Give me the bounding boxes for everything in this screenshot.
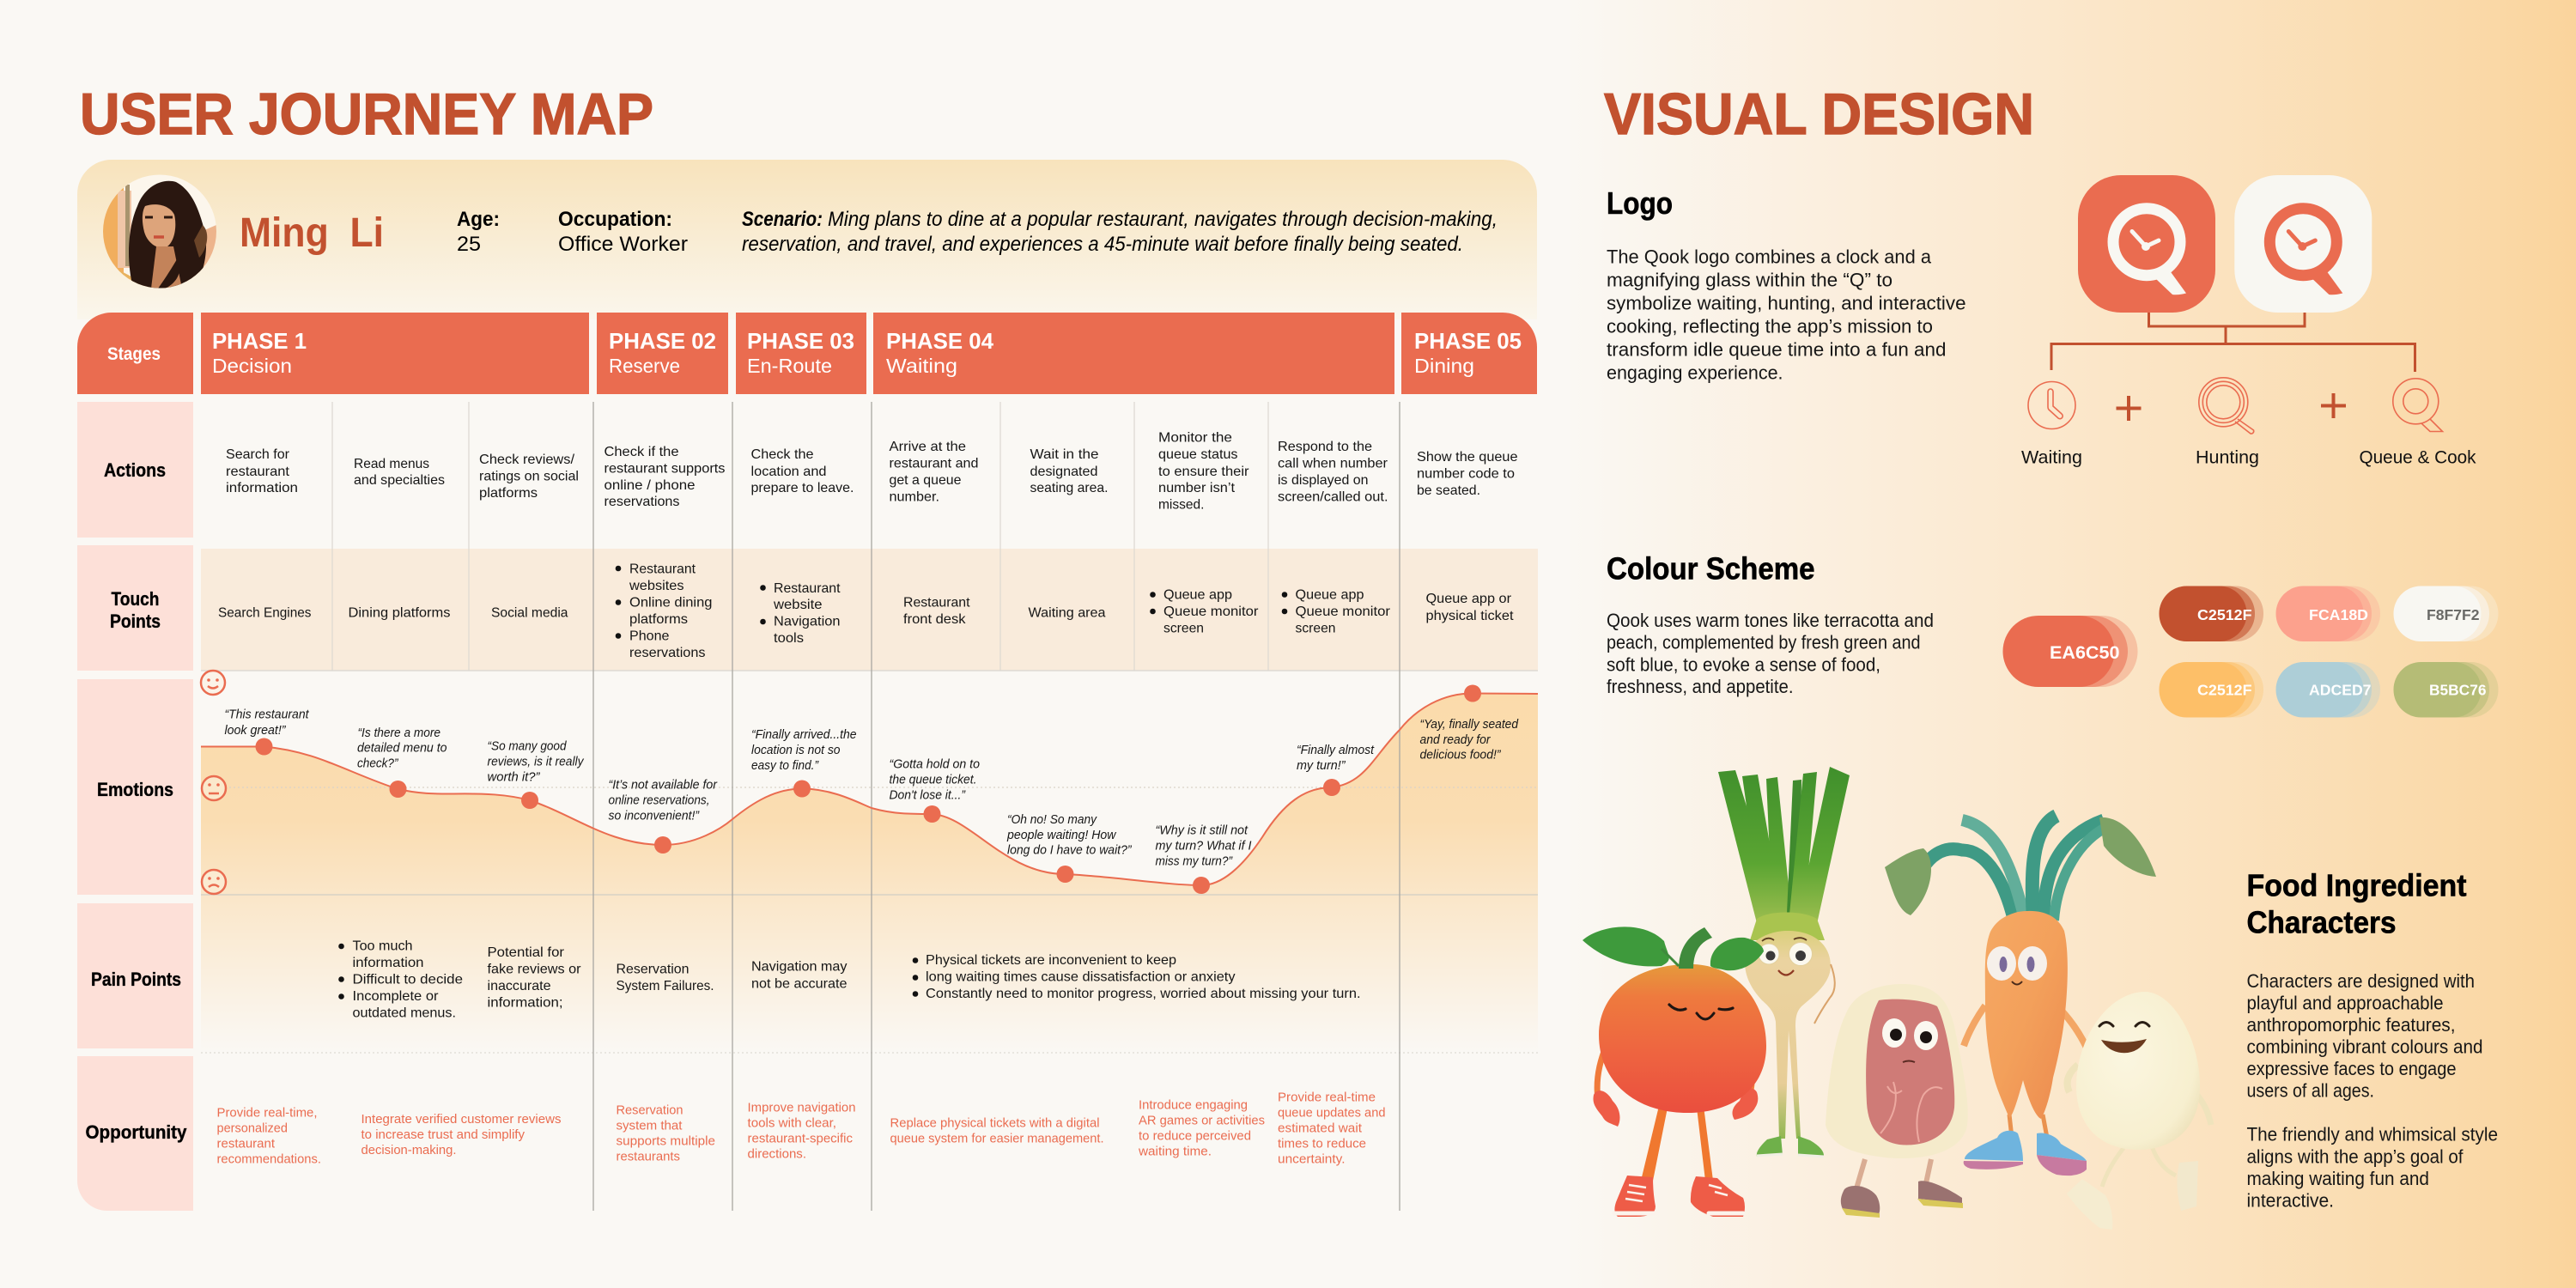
action 6: get a queue xyxy=(890,473,962,488)
action 1: restaurant xyxy=(226,465,290,479)
swatch: FCA18D xyxy=(2275,586,2380,641)
swatch: F8F7F2: F8F7F2 xyxy=(2427,606,2480,623)
label: emotions xyxy=(77,679,193,895)
action 4: reservations xyxy=(605,495,680,509)
action 1 xyxy=(226,447,298,495)
logo description: cooking, reflecting the app’s mission to xyxy=(1607,316,1933,337)
panel: logo section xyxy=(1607,175,2476,467)
quote 10: delicious food!” xyxy=(1420,749,1502,762)
touch point 10: physical ticket xyxy=(1425,609,1514,623)
character: carrot xyxy=(1885,816,2156,1176)
logo: coral tile xyxy=(2078,175,2215,313)
icon: happy face xyxy=(201,671,225,695)
panel: stages bar xyxy=(77,313,1537,394)
action 7: Wait in the xyxy=(1030,447,1099,462)
title: visual design: VISUAL DESIGN xyxy=(1604,82,2034,147)
quote 9: my turn!” xyxy=(1297,759,1346,773)
label: pain points xyxy=(77,903,193,1048)
touch point 4: Restaurant xyxy=(629,562,696,577)
scenario: Ming plans to dine at a popular restaurant, navigates through decision-making, xyxy=(828,208,1498,231)
action 7: seating area. xyxy=(1030,481,1108,495)
opportunity 6: to reduce perceived xyxy=(1139,1128,1251,1144)
panel: pain points row xyxy=(338,939,1361,1020)
touch point 6: Restaurant xyxy=(903,596,970,610)
label: emotions: Emotions xyxy=(97,779,173,800)
logo description: symbolize waiting, hunting, and interactive xyxy=(1607,292,1966,314)
quote 8: “Why is it still not xyxy=(1156,824,1249,838)
action 6: Arrive at the xyxy=(890,440,966,454)
quote 9 xyxy=(1297,744,1375,773)
pain point: fake reviews xyxy=(488,945,581,1010)
opportunity 1: restaurant xyxy=(216,1137,276,1151)
opportunity 2: Integrate verified customer reviews xyxy=(361,1112,562,1127)
pain point: decision menus: information xyxy=(352,956,424,970)
quote 9: “Finally almost xyxy=(1297,744,1375,757)
quote 8: my turn? What if I xyxy=(1156,840,1252,854)
swatch: EA6C50: EA6C50 xyxy=(2050,643,2119,663)
emotion curve area fill xyxy=(201,694,1538,1053)
action 3: ratings on social xyxy=(479,469,579,484)
opportunity 3: system that xyxy=(617,1118,683,1133)
character: apple xyxy=(1583,927,1766,1217)
action 9: Respond to the xyxy=(1278,440,1372,454)
pain point: reservation failures: Reservation xyxy=(617,962,689,977)
character: meat xyxy=(1826,984,1968,1218)
heading: food ingredient characters xyxy=(2246,867,2467,939)
opportunity 7: estimated wait xyxy=(1278,1121,1363,1135)
opportunity 6: AR games or activities xyxy=(1139,1113,1265,1128)
pain point: waiting: Constantly need to monitor progress, worried about missing your turn. xyxy=(926,987,1360,1001)
action 7 xyxy=(1030,447,1108,495)
touch point 9: screen xyxy=(1295,622,1336,635)
age: 25 xyxy=(457,233,481,256)
pain point: fake reviews: Potential for xyxy=(488,945,565,960)
pain point: decision menus: Difficult to decide xyxy=(352,972,463,987)
touch point 9 xyxy=(1282,587,1391,635)
label: touch points xyxy=(77,545,193,671)
quote 3 xyxy=(488,740,584,785)
characters description xyxy=(2246,970,2498,1211)
swatch: B5BC76: B5BC76 xyxy=(2429,682,2487,699)
curve points xyxy=(256,685,1481,894)
occupation xyxy=(558,208,688,256)
logo: light tile xyxy=(2234,175,2372,313)
occupation: Occupation: xyxy=(558,208,672,231)
phase 04: PHASE 04 xyxy=(886,328,994,354)
quote 2 xyxy=(357,726,447,771)
phase 05: Dining xyxy=(1414,355,1474,377)
touch point 10 xyxy=(1425,592,1514,623)
touch point 5: Navigation xyxy=(774,615,840,629)
swatch: B5BC76 xyxy=(2394,662,2499,718)
quote 6: Don't lose it...” xyxy=(890,788,966,802)
pain point: decision menus xyxy=(338,939,463,1020)
swatch: peach yellow xyxy=(2159,662,2263,718)
label: actions xyxy=(77,402,193,538)
action 2: Read menus xyxy=(354,457,429,471)
action 3: Check reviews/ xyxy=(479,453,575,467)
scenario: Scenario: xyxy=(742,208,823,231)
opportunity 1: Provide real-time, xyxy=(216,1106,318,1120)
quote 6 xyxy=(890,757,980,802)
icon: hunting magnifier xyxy=(2199,378,2254,434)
action 7: designated xyxy=(1030,465,1097,479)
action 8: queue status xyxy=(1158,447,1238,462)
occupation: Office Worker xyxy=(558,233,688,256)
touch point 10: Queue app or xyxy=(1425,592,1512,606)
opportunity 7: Provide real-time xyxy=(1278,1091,1376,1104)
opportunity 6: Introduce engaging xyxy=(1139,1097,1248,1113)
chart: emotion curve xyxy=(201,671,1538,894)
icon: plus two xyxy=(2321,393,2346,418)
logo description: magnifying glass within the “Q” to xyxy=(1607,270,1893,290)
opportunity 7: queue updates and xyxy=(1278,1106,1386,1120)
opportunity 7: uncertainty. xyxy=(1278,1152,1345,1166)
age xyxy=(457,208,500,256)
touch point 8: Queue app xyxy=(1163,587,1232,603)
characters description: Characters are designed with xyxy=(2246,970,2475,992)
pain point: waiting: Physical tickets are inconvenient to keep xyxy=(926,953,1176,968)
label: actions: Actions xyxy=(104,459,166,481)
action 5: Check the xyxy=(750,447,814,462)
quote 8 xyxy=(1156,824,1252,869)
opportunity 4 xyxy=(747,1101,855,1161)
page background right gradient xyxy=(1563,0,2576,1288)
panel: persona header card xyxy=(77,160,1537,319)
panel: food ingredient characters illustration xyxy=(1583,767,2211,1230)
action 10: Show the queue xyxy=(1417,450,1518,465)
pain point: waiting: long waiting times cause dissatisfaction or anxiety xyxy=(926,970,1235,984)
pain point: navigation: Navigation may xyxy=(751,960,847,974)
opportunity 1: personalized xyxy=(216,1121,288,1135)
quote 10: “Yay, finally seated xyxy=(1420,718,1519,732)
pain point: fake reviews: fake reviews or xyxy=(488,962,581,977)
action 4: online / phone xyxy=(605,478,696,493)
action 4: Check if the xyxy=(605,445,679,459)
phase 05 xyxy=(1401,313,1537,394)
action 1: Search for xyxy=(226,447,290,462)
quote 4: “It’s not available for xyxy=(608,778,718,792)
icon labels: Waiting xyxy=(2021,447,2082,467)
opportunity 3: Reservation xyxy=(617,1103,683,1118)
quote 1: “This restaurant xyxy=(225,708,309,721)
touch point 7: Waiting area xyxy=(1029,606,1106,620)
character: leek xyxy=(1718,767,1850,1157)
action 5: location and xyxy=(750,465,826,479)
colour scheme description: peach, complemented by fresh green and xyxy=(1607,632,1920,653)
opportunity 5: queue system for easier management. xyxy=(890,1132,1104,1145)
icon labels: Queue & Cook xyxy=(2360,447,2476,467)
quote 8: miss my turn?” xyxy=(1156,855,1233,869)
heading: logo: Logo xyxy=(1607,185,1673,221)
phase 02: Reserve xyxy=(609,355,680,377)
opportunity 3: supports multiple xyxy=(617,1133,715,1149)
quote 1 xyxy=(225,708,309,738)
opportunity 5: Replace physical tickets with a digital xyxy=(890,1116,1099,1130)
action 4: restaurant supports xyxy=(605,462,725,476)
logo description: transform idle queue time into a fun and xyxy=(1607,338,1946,361)
opportunity 2 xyxy=(361,1112,562,1157)
pain point: decision menus: Too much xyxy=(352,939,412,953)
characters description: making waiting fun and xyxy=(2246,1168,2429,1189)
pain point: fake reviews: information; xyxy=(488,996,563,1010)
phase 05: PHASE 05 xyxy=(1414,328,1522,354)
touch point 4: reservations xyxy=(629,646,706,660)
pain point: decision menus: Incomplete or xyxy=(352,989,439,1004)
pain point: reservation failures xyxy=(617,962,714,993)
quote 4: online reservations, xyxy=(608,793,709,807)
curve line xyxy=(201,694,1538,885)
touch point 3: Social media xyxy=(491,606,568,620)
label: touch points: Touch xyxy=(112,588,160,610)
action 9: is displayed on xyxy=(1278,473,1369,488)
heading: food ingredient characters: Characters xyxy=(2246,905,2396,939)
logo description: engaging experience. xyxy=(1607,362,1783,383)
action 10: be seated. xyxy=(1417,483,1480,498)
action 1: information xyxy=(226,481,298,495)
touch point 8: Queue monitor xyxy=(1163,605,1259,619)
touch point 5: tools xyxy=(774,631,804,646)
characters description: aligns with the app’s goal of xyxy=(2246,1145,2464,1168)
quote 3: reviews, is it really xyxy=(488,756,584,769)
quote 5: “Finally arrived...the xyxy=(751,728,857,742)
quote 2: check?” xyxy=(357,757,399,771)
action 8: Monitor the xyxy=(1158,431,1232,445)
pain point: decision menus: outdated menus. xyxy=(352,1006,456,1020)
touch point 5: website xyxy=(773,598,823,612)
pain point: fake reviews: inaccurate xyxy=(488,979,551,993)
quote 4 xyxy=(608,778,718,823)
quote 5 xyxy=(751,728,857,773)
phase 1: Decision xyxy=(212,355,292,377)
swatch: ADCED7 xyxy=(2275,662,2380,718)
touch point 5: Restaurant xyxy=(774,581,841,596)
quote 1: look great!” xyxy=(225,724,287,738)
pain point: reservation failures: System Failures. xyxy=(617,979,714,993)
persona name: Ming Li xyxy=(240,210,384,256)
avatar portrait xyxy=(103,174,216,289)
phase 02 xyxy=(597,313,728,394)
character: egg xyxy=(2067,992,2211,1230)
opportunity 3: restaurants xyxy=(617,1149,680,1164)
swatch: EA6C50 xyxy=(2002,616,2138,687)
quote 2: “Is there a more xyxy=(357,726,440,740)
heading: food ingredient characters: Food Ingredient xyxy=(2246,867,2467,903)
icon labels xyxy=(2021,447,2476,467)
touch point 4: Online dining xyxy=(629,596,713,610)
touch point 2: Dining platforms xyxy=(349,606,450,620)
label: opportunity xyxy=(77,1056,193,1211)
quote 6: the queue ticket. xyxy=(890,773,977,787)
quote 10 xyxy=(1420,718,1519,762)
action 10: number code to xyxy=(1417,467,1515,481)
label: opportunity: Opportunity xyxy=(86,1121,187,1143)
icon labels: Hunting xyxy=(2196,447,2259,467)
phase 03 xyxy=(736,313,866,394)
panel: touch points row xyxy=(218,562,1514,660)
phase 03: PHASE 03 xyxy=(747,328,854,354)
phase 1: PHASE 1 xyxy=(212,328,307,354)
characters description: interactive. xyxy=(2246,1190,2334,1211)
opportunity 7 xyxy=(1278,1091,1386,1166)
touch point 4: websites xyxy=(629,579,683,593)
quote 6: “Gotta hold on to xyxy=(890,757,980,771)
swatch: C2512F xyxy=(2159,586,2263,641)
characters description: combining vibrant colours and xyxy=(2246,1036,2483,1058)
opportunity 5 xyxy=(890,1116,1104,1145)
opportunity 6 xyxy=(1138,1097,1265,1159)
quote 5: easy to find.” xyxy=(751,759,819,773)
colour scheme description: soft blue, to evoke a sense of food, xyxy=(1607,654,1880,675)
icon: queue and cook Q xyxy=(2393,379,2442,431)
characters description: playful and approachable xyxy=(2246,993,2444,1013)
scenario xyxy=(742,208,1498,256)
characters description: expressive faces to engage xyxy=(2246,1058,2456,1079)
phase 03: En-Route xyxy=(747,355,832,377)
label: touch points: Points xyxy=(110,611,161,632)
phase 04 xyxy=(873,313,1394,394)
title: user journey map: USER JOURNEY MAP xyxy=(80,82,653,147)
touch point 4 xyxy=(616,562,713,660)
panel: colour scheme xyxy=(1607,551,2499,718)
icon: plus one xyxy=(2116,396,2142,421)
logo description: The Qook logo combines a clock and a xyxy=(1607,246,1931,268)
touch points row background xyxy=(201,549,1538,671)
opportunity 1 xyxy=(216,1106,321,1166)
quote 7: “Oh no! So many xyxy=(1007,813,1097,827)
touch point 4: platforms xyxy=(629,612,688,627)
logo description xyxy=(1607,246,1966,383)
action 5 xyxy=(750,447,854,495)
opportunity 2: decision-making. xyxy=(361,1143,457,1157)
quote 3: worth it?” xyxy=(488,771,541,785)
icon: waiting clock xyxy=(2028,381,2075,429)
panel: opportunity row xyxy=(216,1091,1386,1166)
swatch: F8F7F2 xyxy=(2394,586,2499,641)
action 6: restaurant and xyxy=(890,457,979,471)
swatch: FCA18D: FCA18D xyxy=(2309,606,2368,623)
opportunity 1: recommendations. xyxy=(216,1152,321,1166)
swatch: ADCED7: ADCED7 xyxy=(2309,682,2372,699)
swatch: C2512F: C2512F xyxy=(2197,606,2252,623)
quote 3: “So many good xyxy=(488,740,567,754)
opportunity 4: directions. xyxy=(747,1147,806,1161)
quote 7: long do I have to wait?” xyxy=(1007,843,1133,857)
logo connector lines xyxy=(2051,313,2415,372)
pain point: navigation: not be accurate xyxy=(751,977,848,991)
opportunity 4: tools with clear, xyxy=(747,1116,836,1130)
action 6: number. xyxy=(890,489,939,505)
characters description: The friendly and whimsical style xyxy=(2246,1123,2498,1145)
touch point 8 xyxy=(1150,587,1259,635)
action 2 xyxy=(354,457,445,488)
touch point 6 xyxy=(903,596,970,627)
colour scheme description: freshness, and appetite. xyxy=(1607,676,1793,697)
action 3 xyxy=(479,453,579,501)
opportunity 6: waiting time. xyxy=(1138,1144,1212,1159)
label: pain points: Pain Points xyxy=(91,969,181,990)
phase 02: PHASE 02 xyxy=(609,328,716,354)
touch point 9: Queue monitor xyxy=(1295,605,1391,619)
age: Age: xyxy=(457,208,500,231)
opportunity 7: times to reduce xyxy=(1278,1137,1366,1151)
pain point: waiting xyxy=(913,953,1360,1001)
stages label: Stages xyxy=(107,344,161,364)
colour scheme description xyxy=(1607,610,1934,697)
action 8: to ensure their xyxy=(1158,465,1249,479)
quote 5: location is not so xyxy=(751,744,840,757)
action 5: prepare to leave. xyxy=(750,481,854,495)
action 10 xyxy=(1417,450,1518,498)
phase 1 xyxy=(201,313,589,394)
icon: sad face xyxy=(202,870,226,894)
opportunity 2: to increase trust and simplify xyxy=(361,1127,526,1142)
action 8: missed. xyxy=(1158,498,1204,512)
scenario: reservation, and travel, and experiences a 45-minute wait before finally being seated. xyxy=(742,233,1463,256)
quote 7 xyxy=(1006,813,1133,857)
touch point 4: Phone xyxy=(629,629,670,644)
icon: neutral face xyxy=(202,776,226,800)
action 8: number isn’t xyxy=(1158,481,1236,495)
touch point 6: front desk xyxy=(903,612,967,627)
action 9: call when number xyxy=(1278,457,1388,471)
panel: food ingredient characters text xyxy=(2246,867,2498,1211)
opportunity 3 xyxy=(617,1103,715,1164)
quote 7: people waiting! How xyxy=(1006,829,1117,842)
quote 4: so inconvenient!” xyxy=(608,809,700,823)
touch point 1: Search Engines xyxy=(218,606,311,620)
characters description: users of all ages. xyxy=(2246,1080,2374,1101)
heading: colour scheme: Colour Scheme xyxy=(1607,551,1815,586)
touch point 9: Queue app xyxy=(1295,587,1364,603)
opportunity 4: Improve navigation xyxy=(747,1101,855,1115)
pain point: navigation xyxy=(751,960,848,991)
stages label xyxy=(77,313,193,394)
action 6 xyxy=(890,440,979,505)
action 2: and specialties xyxy=(354,473,445,488)
panel: actions row xyxy=(226,431,1518,512)
action 9: screen/called out. xyxy=(1278,489,1388,505)
action 8 xyxy=(1158,431,1249,512)
opportunity 4: restaurant-specific xyxy=(747,1132,853,1145)
quote 10: and ready for xyxy=(1420,733,1492,747)
touch point 8: screen xyxy=(1163,622,1204,635)
phase 04: Waiting xyxy=(886,355,957,377)
panel: row labels xyxy=(77,402,193,1211)
characters description: anthropomorphic features, xyxy=(2246,1014,2456,1036)
swatch: peach yellow: C2512F xyxy=(2197,682,2252,699)
action 9 xyxy=(1278,440,1388,505)
quote 2: detailed menu to xyxy=(357,742,447,756)
action 3: platforms xyxy=(479,486,538,501)
touch point 5 xyxy=(760,581,841,646)
action 4 xyxy=(605,445,725,509)
colour scheme description: Qook uses warm tones like terracotta and xyxy=(1607,610,1934,631)
